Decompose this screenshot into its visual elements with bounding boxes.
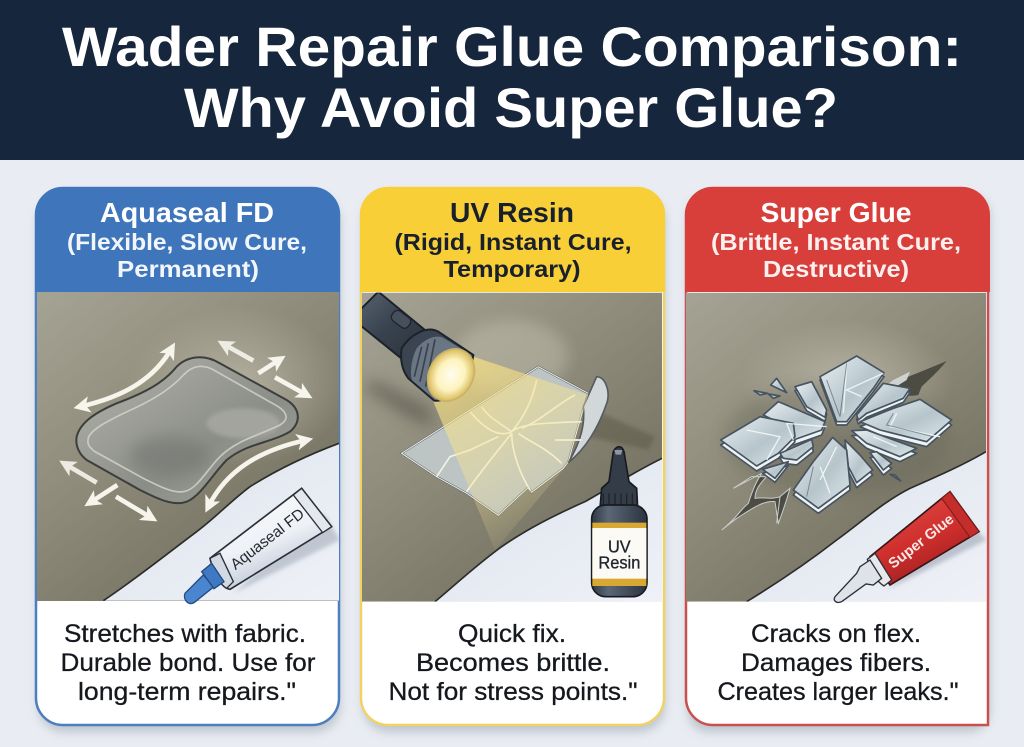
icon: torn fabric cracks <box>722 361 947 530</box>
icon: UV Resin bottle: Resin <box>598 553 640 573</box>
shard faces <box>721 356 952 508</box>
caption: Super Glue <box>718 620 958 706</box>
caption: Aquaseal FD: long-term repairs." <box>78 678 296 706</box>
caption: UV Resin: Quick fix. <box>458 620 566 648</box>
caption: Super Glue: Cracks on flex. <box>751 620 921 648</box>
icon: UV Resin bottle: UV <box>608 537 631 557</box>
icon: cracked resin sheet <box>402 367 608 515</box>
heading: UV Resin: Temporary) <box>444 256 580 282</box>
heading: UV Resin: (Rigid, Instant Cure, <box>394 229 632 255</box>
icon: Super Glue tube: Super Glue <box>886 512 957 572</box>
icon: shattered glue shards <box>721 356 952 513</box>
caption: Aquaseal FD <box>60 620 316 706</box>
icon: Aquaseal FD tube <box>184 488 340 604</box>
heading: Aquaseal FD: Aquaseal FD <box>100 197 274 228</box>
fabric edge <box>435 458 662 602</box>
caption: Aquaseal FD: Stretches with fabric. <box>64 620 306 648</box>
illustration: cracked resin under UV light <box>352 292 662 602</box>
heading: Super Glue <box>685 187 990 292</box>
heading: Aquaseal FD: (Flexible, Slow Cure, <box>67 229 307 255</box>
caption: UV Resin: Not for stress points." <box>388 678 638 706</box>
shard thickness <box>721 360 952 513</box>
heading: UV Resin: UV Resin <box>450 197 574 228</box>
pale corner under fabric <box>747 452 986 602</box>
heading: Super Glue: Destructive) <box>763 256 909 282</box>
icon: Super Glue tube <box>834 492 987 602</box>
icon: Aquaseal FD tube: Aquaseal FD <box>227 505 308 573</box>
title banner <box>0 0 1024 160</box>
heading: Aquaseal FD <box>35 187 340 292</box>
panel: UV Resin <box>352 187 665 732</box>
icon: stretch arrows <box>65 344 307 518</box>
icon: flexible patch <box>76 357 298 503</box>
heading: Aquaseal FD: Permanent) <box>117 256 259 282</box>
fabric edge <box>747 452 986 602</box>
pale corner under fabric <box>103 443 339 601</box>
illustration: stretching patch on wader fabric <box>37 292 347 604</box>
caption: Super Glue: Damages fibers. <box>741 649 931 677</box>
heading: Super Glue: (Brittle, Instant Cure, <box>711 229 961 255</box>
icon: UV Resin bottle <box>592 447 647 597</box>
pale corner under fabric <box>435 458 662 602</box>
title banner: Why Avoid Super Glue? <box>184 76 838 139</box>
illustration: shattered super glue <box>686 293 987 602</box>
shard facet highlights <box>747 363 940 493</box>
icon: UV light beam <box>433 355 588 550</box>
caption: Aquaseal FD: Durable bond. Use for <box>60 649 316 677</box>
caption: Super Glue: Creates larger leaks." <box>718 678 958 706</box>
caption: UV Resin <box>388 620 638 706</box>
icon: flashlight <box>362 292 476 402</box>
heading: Super Glue: Super Glue <box>760 197 912 228</box>
fabric edge <box>103 443 339 601</box>
caption: UV Resin: Becomes brittle. <box>416 649 610 677</box>
panel: Super Glue <box>685 187 990 732</box>
panel: Aquaseal FD <box>35 187 347 732</box>
heading: UV Resin <box>360 187 665 292</box>
title banner: Wader Repair Glue Comparison: <box>62 15 962 78</box>
